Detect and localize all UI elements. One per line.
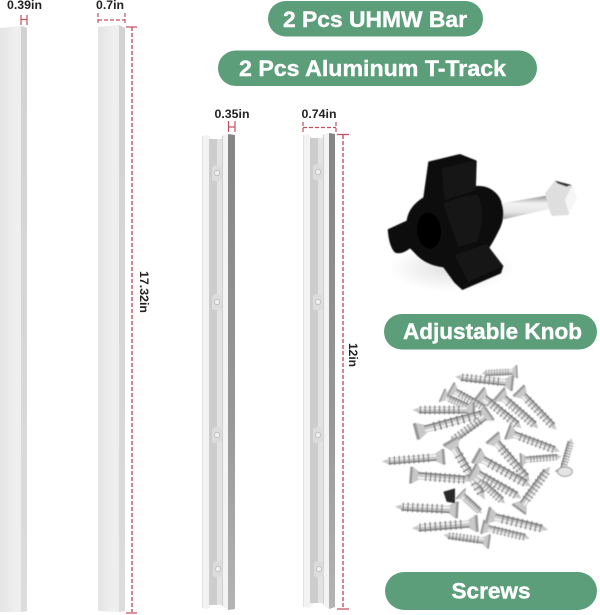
heading: 2 Pcs Aluminum T-Track <box>218 50 537 86</box>
panel: T-track 2 <box>303 133 335 609</box>
knob body <box>388 154 503 290</box>
dimension: bar 2 width <box>96 0 125 24</box>
heading: 2 Pcs UHMW Bar: 2 Pcs UHMW Bar <box>283 7 467 32</box>
panel: UHMW bar 2 <box>98 25 125 612</box>
icon: pile of screws <box>381 365 578 549</box>
dimension: bar length: 17.32in <box>137 271 151 313</box>
panel: UHMW bar 1 <box>0 26 27 612</box>
heading: 2 Pcs Aluminum T-Track: 2 Pcs Aluminum T-Track <box>239 56 506 81</box>
icon: adjustable knob <box>388 154 577 292</box>
dimension: track 2 width: 0.74in <box>302 107 336 121</box>
heading: Screws <box>385 572 597 610</box>
panel: T-track 1 <box>202 134 235 610</box>
dimension: bar 1 width <box>7 0 42 25</box>
icon: bolts on track 2 <box>313 164 324 577</box>
dimension: bar length <box>126 27 151 613</box>
dimension: track 2 width <box>302 107 336 133</box>
knob bore <box>415 212 443 250</box>
heading: Screws: Screws <box>452 578 530 604</box>
dimension: track 1 width <box>214 107 250 132</box>
dimension: track 1 width: 0.35in <box>214 107 250 121</box>
heading: Adjustable Knob: Adjustable Knob <box>403 319 582 344</box>
bolt head <box>545 181 577 216</box>
heading: Adjustable Knob <box>384 314 597 350</box>
dimension: track length <box>337 134 360 609</box>
dimension: track length: 12in <box>346 343 360 367</box>
icon: bolts on track 1 <box>212 165 223 577</box>
bolt shaft <box>502 195 552 219</box>
heading: 2 Pcs UHMW Bar <box>268 1 483 36</box>
